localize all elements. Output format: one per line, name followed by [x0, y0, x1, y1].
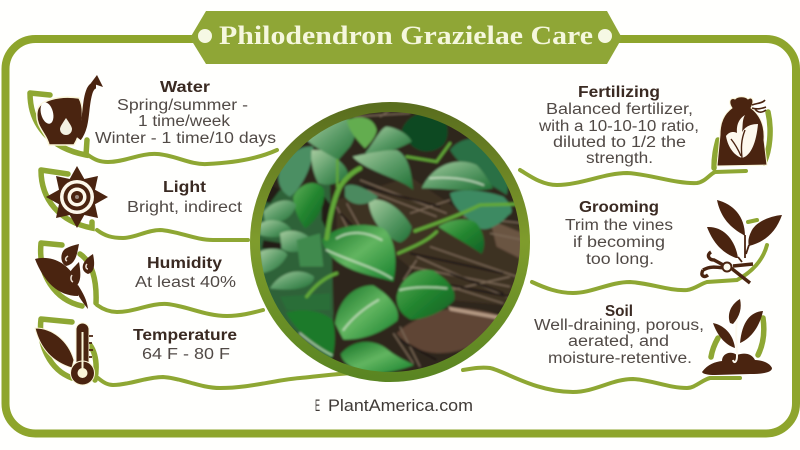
heading: Soil: [605, 303, 633, 320]
panel: light: [41, 166, 248, 240]
photo: philodendron in circle: [250, 100, 530, 383]
text block: Spring/summer -: [117, 97, 248, 114]
panel: humidity: [35, 243, 263, 316]
text block: with a 10-10-10 ratio,: [538, 118, 699, 135]
panel: grooming: [532, 199, 782, 293]
icon: thermometer and leaf: [35, 319, 96, 385]
text block: [565, 217, 673, 268]
icon: sun: [41, 166, 108, 228]
text block: At least 40%: [135, 274, 236, 291]
icon: leaves with drops: [35, 243, 96, 309]
icon: fertilizer bag: [714, 97, 770, 168]
photo ring: [255, 107, 525, 377]
text block: aerated, and: [568, 333, 669, 350]
left foliage backing: [257, 183, 333, 367]
text block: Trim the vines: [565, 217, 673, 234]
icon: leaves and pruning shears: [702, 200, 782, 283]
text block: [534, 317, 704, 367]
text block: diluted to 1/2 the: [553, 134, 686, 151]
leaf highlights: [300, 178, 483, 355]
text block: if becoming: [573, 234, 665, 251]
heading: Water: [160, 79, 210, 96]
fallen brown leaves: [337, 177, 523, 353]
icon: sprout in soil: [702, 299, 772, 375]
heading: Humidity: [147, 255, 222, 272]
text block: moisture-retentive.: [548, 350, 692, 367]
text block: 1 time/week: [138, 113, 230, 130]
text block: [538, 101, 699, 167]
text block: [95, 97, 276, 147]
source credit: PlantAmerica.com: [328, 396, 473, 415]
text block: Well-draining, porous,: [534, 317, 704, 334]
text block: strength.: [586, 150, 653, 167]
panel: temperature: [35, 319, 740, 392]
source credit: E: [315, 396, 320, 415]
text block: Balanced fertilizer,: [546, 101, 693, 118]
text block: Bright, indirect: [127, 199, 243, 216]
panel: fertilizing: [520, 84, 770, 185]
leaves: [260, 112, 512, 373]
heading: Fertilizing: [578, 84, 660, 101]
panel: soil: [534, 299, 772, 375]
stems: [307, 143, 520, 297]
heading: Grooming: [579, 199, 659, 216]
panel: water: [30, 75, 277, 164]
title banner: [190, 11, 622, 64]
icon: watering can: [30, 75, 103, 155]
heading: Light: [163, 179, 207, 196]
title: Philodendron Grazielae Care: [219, 21, 593, 50]
text block: too long.: [586, 251, 654, 268]
text block: 64 F - 80 F: [142, 346, 230, 363]
text block: Winter - 1 time/10 days: [95, 130, 276, 147]
heading: Temperature: [133, 327, 237, 344]
